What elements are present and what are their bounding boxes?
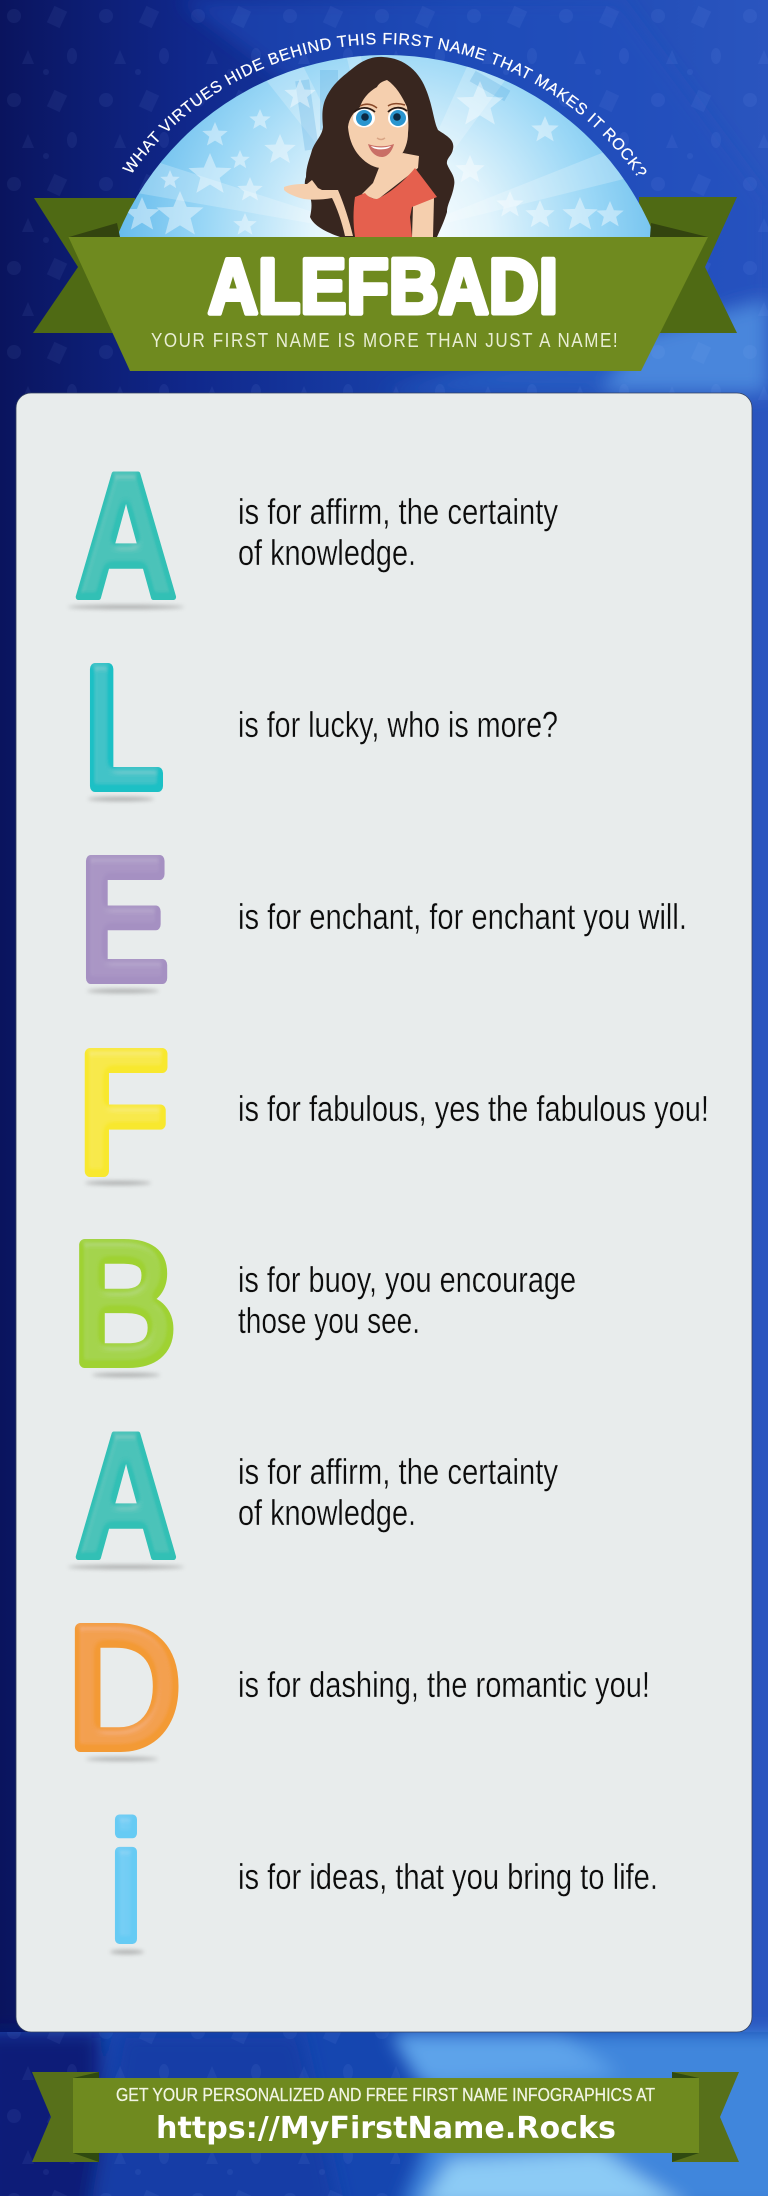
name title: ALEFBADI [208,242,558,330]
curved heading: WHAT VIRTUES HIDE BEHIND THIS FIRST NAME THAT MAKES IT ROCK? [122,32,646,176]
row: B: those you see. [238,1300,420,1341]
row: i [110,1791,658,1975]
row: i: is for ideas, that you bring to life. [238,1856,658,1897]
row: F: F [78,1017,168,1207]
row: B: B [72,1208,176,1398]
row: A: A [75,437,177,636]
eyes [353,104,408,128]
row: E: E [80,825,168,1015]
ribbon tails: footer [32,2072,739,2162]
row: B [72,1208,576,1398]
row: A second: is for affirm, the certainty [238,1451,558,1492]
row: F [78,1017,709,1207]
row: L [83,633,558,823]
row: A second: of knowledge. [238,1492,416,1533]
arm and hand [284,180,353,236]
smile [368,144,394,157]
row: A [68,437,558,636]
row: A: is for affirm, the certainty [238,491,558,532]
row: L: is for lucky, who is more? [238,704,558,745]
subtitle: YOUR FIRST NAME IS MORE THAN JUST A NAME! [151,329,618,351]
footer url: https://MyFirstName.Rocks [156,2111,616,2146]
character illustration [284,57,454,237]
row: D [68,1592,650,1782]
row: E [80,825,687,1015]
hair [305,57,454,237]
face [348,80,408,168]
teeth [371,146,391,149]
row: L: L [83,633,163,823]
neck and chest [362,153,419,200]
ribbon: footer [73,2078,699,2153]
row: i: i [110,1791,142,1975]
ribbon: header [68,237,708,371]
ribbon tails: header [33,197,737,333]
footer call to action: GET YOUR PERSONALIZED AND FREE FIRST NAME INFOGRAPHICS AT [116,2085,655,2105]
row: B: is for buoy, you encourage [238,1259,576,1300]
panel: virtues [16,393,752,2032]
row: D: D [68,1592,180,1782]
sunburst dome [119,55,651,237]
right arm [412,198,434,237]
row: A: of knowledge. [238,532,416,573]
row: A second [68,1397,558,1596]
ribbon folds: header [69,223,708,237]
nose [377,138,385,140]
top [354,168,437,237]
row: D: is for dashing, the romantic you! [238,1664,650,1705]
row: A second: A [75,1397,177,1596]
